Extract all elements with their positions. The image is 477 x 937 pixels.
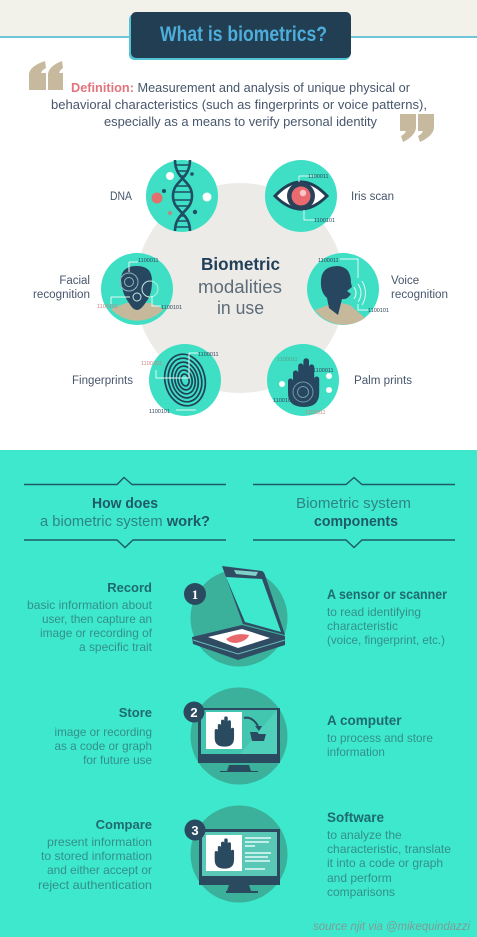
step: record: Record [107,580,152,595]
step: record [27,580,153,654]
panel: how it works [0,450,477,937]
central circle: in use [217,298,264,318]
icon: computer comparing image [184,806,288,902]
central circle: modalities [198,277,282,297]
definition text: Definition: Measurement and analysis of unique physical or [71,80,411,95]
step: store [55,705,152,767]
label: facial recognition: recognition [33,289,90,301]
label: palm prints: Palm prints [354,375,412,387]
icon: computer storing image: 2 [190,705,198,720]
heading: how does a biometric system work: a biometric system work? [40,514,210,530]
icon: palm print: 1100011 [305,410,326,416]
label: voice recognition [391,275,448,301]
icon: palm print [267,344,339,416]
component: software: comparisons [327,885,395,899]
component: computer: to process and store [327,732,433,745]
icon: computer storing image [184,688,288,784]
component: sensor or scanner: to read identifying [327,605,421,619]
icon: voice recognition: 1100011 [318,258,339,264]
icon: fingerprint [141,344,221,416]
label: facial recognition: Facial [59,275,90,287]
definition text: behavioral characteristics (such as fingerprints or voice patterns), [51,97,427,112]
icon: fingerprint: 1100011 [198,352,219,358]
component: software: it into a code or graph [327,856,443,870]
label: voice recognition: recognition [391,289,448,301]
step: compare: reject authentication [38,878,152,892]
icon: facial recognition: 1100011 [138,258,159,264]
icon: opening quote [29,61,63,90]
icon: computer comparing image: 3 [191,823,199,838]
icon: fingerprint: 1100101 [149,409,170,415]
component: software: characteristic, translate [327,842,451,856]
icon: closing quote [400,114,434,142]
source credit: source njit via @mikequindazzi [313,921,470,933]
component: sensor or scanner: characteristic [327,619,398,633]
component: computer: information [327,746,385,759]
definition text [51,80,427,129]
component: sensor or scanner: A sensor or scanner [327,587,448,602]
component: software: Software [327,810,385,825]
step: record: image or recording of [40,626,153,640]
component: computer: A computer [327,713,402,728]
heading: how does a biometric system work [24,478,226,548]
central circle: Biometric [201,254,280,274]
heading: biometric system components: Biometric system [296,496,411,512]
heading: how does a biometric system work: How does [92,496,158,512]
top band [0,0,477,38]
icon: iris scan [265,160,337,232]
icon: palm print: 1100011 [313,368,334,374]
label: facial recognition [33,275,90,301]
step: record: basic information about [27,598,153,612]
heading: biometric system components: components [314,514,398,530]
component: software [327,810,451,899]
label: DNA: DNA [110,191,132,203]
component: sensor or scanner [327,587,448,647]
label: iris scan: Iris scan [351,191,394,203]
step: record: user, then capture an [42,612,152,626]
component: software: and perform [327,871,392,885]
icon: iris scan: 1100101 [314,218,335,224]
step: store: for future use [83,754,152,767]
icon: iris scan: 1100011 [308,174,329,180]
icon: fingerprint: 1100101 [141,361,162,367]
component: computer [327,713,433,759]
step: store: image or recording [55,726,152,739]
icon: palm print: 1100101 [273,398,294,404]
icon: facial recognition: 1100101 [161,305,182,311]
step: compare: present information [47,835,152,849]
icon: DNA [146,160,218,232]
icon: palm print: 1100011 [277,357,298,363]
icon: scanner [184,566,288,666]
heading: biometric system components [253,478,455,548]
step: store: Store [119,705,152,720]
label: fingerprints: Fingerprints [72,375,133,387]
icon: facial recognition [97,253,182,325]
central circle [135,183,345,393]
step: store: as a code or graph [55,740,152,753]
step: compare [38,817,152,892]
step: record: a specific trait [79,640,153,654]
title [129,12,351,60]
step: compare: to stored information [41,849,152,863]
component: software: to analyze the [327,828,402,842]
icon: facial recognition: 1100101 [97,304,118,310]
icon: voice recognition: 1100101 [368,308,389,314]
title: What is biometrics? [160,23,327,46]
label: voice recognition: Voice [391,275,419,287]
step: compare: Compare [96,817,152,832]
definition text: especially as a means to verify personal identity [104,114,377,129]
step: compare: and either accept or [47,863,152,877]
icon: scanner: 1 [192,587,198,602]
component: sensor or scanner: (voice, fingerprint, etc.) [327,633,445,647]
icon: voice recognition [307,253,389,325]
